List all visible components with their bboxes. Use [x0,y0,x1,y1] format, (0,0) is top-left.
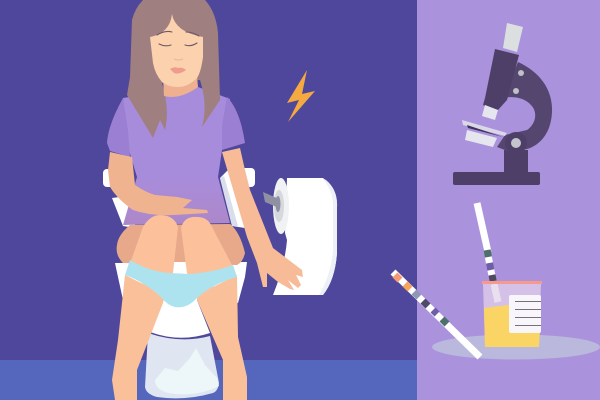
toilet tank sides [103,169,119,187]
base [453,172,540,185]
lower legs [112,275,165,400]
tube [483,49,519,110]
hair [127,0,220,138]
test strip in beaker [477,203,493,281]
thighs and knees [127,215,178,300]
eyes and brows [157,31,199,46]
toilet bowl base [145,333,219,398]
hips [117,224,245,265]
objective lens [482,105,498,120]
test strip lying [393,272,480,357]
toilet [103,168,255,398]
icon: lightning bolt [287,70,315,122]
panel: floor [0,360,417,400]
underwear [125,260,237,307]
left arm and hand on belly [108,152,208,215]
beaker rim [482,281,542,284]
mouth [170,67,186,74]
toilet seat [115,262,247,338]
woman [107,0,303,400]
shadow ellipse [432,334,600,360]
toilet water highlight [155,348,219,394]
seat gap between thighs [174,262,190,276]
urine [484,305,541,347]
arm [497,62,552,152]
pillar [504,150,528,174]
shirt sleeves [107,98,130,157]
nose [174,59,183,60]
right arm and hand on paper [222,148,303,290]
stage [462,120,507,136]
paper holder [263,192,279,208]
shirt torso [123,87,230,225]
toilet paper roll [263,178,337,295]
paper sheet [273,178,337,295]
eyepiece [503,23,523,52]
condenser [465,130,497,147]
panel: lilac lab background [417,0,600,400]
microscope [453,23,552,185]
screws [518,70,524,76]
label [509,295,541,333]
strip seen through glass [494,284,498,302]
panel: dark wall background [0,0,417,360]
roll end [273,178,289,234]
beaker glass [483,282,541,347]
face [150,14,203,87]
neck [163,76,198,97]
beaker [482,281,542,347]
